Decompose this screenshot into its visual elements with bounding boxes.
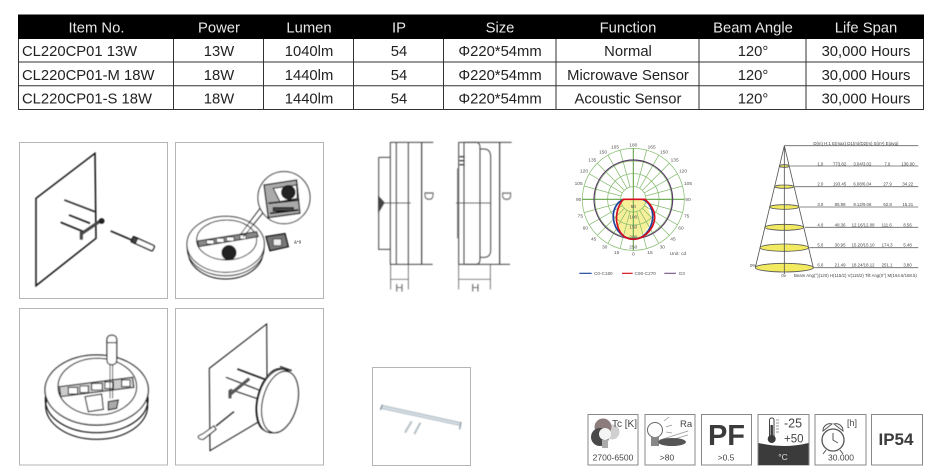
data columns: 136.00 <box>901 161 915 166</box>
angle and intensity labels: 90 <box>685 197 691 203</box>
angle and intensity labels: 45 <box>591 236 597 242</box>
panel: mounting bracket and screws <box>372 368 470 466</box>
icon: lifetime alarm clock: [h] <box>847 418 857 428</box>
data columns: 0% <box>750 263 756 268</box>
data columns: 773.82 <box>833 161 847 166</box>
data columns: 9.12/9.06 <box>853 202 872 207</box>
data columns: 48.36 <box>835 222 846 227</box>
icon: power factor: >0.5 <box>718 452 735 462</box>
angle and intensity labels: 45 <box>670 236 676 242</box>
table header row: Beam Angle <box>713 21 793 37</box>
data columns: 6.0 <box>817 263 824 268</box>
angle and intensity labels: 120 <box>679 168 687 174</box>
table row: CL220CP01-M 18W: 30,000 Hours <box>822 68 910 84</box>
cone with light ellipses <box>755 146 813 274</box>
table row: CL220CP01 13W: 30,000 Hours <box>822 44 910 60</box>
angle and intensity labels: 150 <box>629 224 638 230</box>
table row: CL220CP01 13W: 120° <box>738 44 768 60</box>
angle and intensity labels: 60 <box>583 226 588 232</box>
icon: lifetime alarm clock: 30.000 <box>828 452 854 462</box>
icon: colour temperature <box>588 414 638 465</box>
data columns: 6.08/6.04 <box>853 182 872 187</box>
icon: colour rendering index <box>645 414 695 465</box>
data columns: 251.1 <box>882 263 893 268</box>
data columns: 85.98 <box>835 202 846 207</box>
data columns: 1.0 <box>817 161 824 166</box>
side view with bracket <box>379 142 435 295</box>
data columns: 3.04/3.02 <box>853 161 872 166</box>
side view with bracket: H <box>395 283 403 295</box>
data columns: 27.9 <box>883 182 892 187</box>
angle and intensity labels: 165 <box>611 145 619 151</box>
table row: CL220CP01-M 18W: CL220CP01-M 18W <box>22 68 154 84</box>
table row: CL220CP01-S 18W: 18W <box>204 92 234 108</box>
data columns: 4.0 <box>817 222 824 227</box>
table header row <box>18 14 924 39</box>
icon: power factor: PF <box>708 420 745 452</box>
table header row: Item No. <box>69 21 124 37</box>
angle and intensity labels: 120 <box>580 168 588 174</box>
dimension drawing: side views <box>379 142 513 295</box>
table row: CL220CP01-M 18W: Φ220*54mm <box>458 68 542 84</box>
data columns: 62.8 <box>883 202 892 207</box>
data columns: 5.0 <box>817 243 824 248</box>
side view with sensor dome <box>456 142 513 295</box>
data columns: 3.0 <box>817 202 824 207</box>
data columns: 7.0 <box>884 161 891 166</box>
table row: CL220CP01-S 18W: 120° <box>738 92 768 108</box>
table row: CL220CP01-M 18W: 54 <box>391 68 407 84</box>
table grid <box>18 39 924 110</box>
angle and intensity labels: 100 <box>629 214 638 220</box>
data columns: 15.20/15.10 <box>852 243 875 248</box>
angle and intensity labels: 30 <box>660 245 665 251</box>
angle and intensity labels: 105 <box>684 181 692 187</box>
curve: G3 <box>594 160 673 239</box>
panel: step 4, mount lamp on wall <box>176 308 324 465</box>
icon: operating temperature: -25 <box>784 417 802 431</box>
icon row: product ratings <box>588 414 922 465</box>
angle and intensity labels: 50 <box>631 204 636 210</box>
angle and intensity labels: 135 <box>588 158 597 164</box>
chart legend <box>579 271 685 276</box>
data columns: D(m) H:1 E(max) D1(m)/D2(m) S(m²) E(avg) <box>813 141 899 146</box>
angle and intensity labels: 30 <box>602 245 608 251</box>
data columns: 111.6 <box>882 222 892 227</box>
table row: CL220CP01-S 18W: CL220CP01-S 18W <box>22 92 152 108</box>
data columns: 5.48 <box>903 243 912 248</box>
table row: CL220CP01 13W: 1040lm <box>285 44 333 60</box>
table row: CL220CP01-M 18W: 120° <box>738 68 768 84</box>
data columns: 3.80 <box>903 263 912 268</box>
angle and intensity labels <box>575 143 692 258</box>
data columns: 2.0 <box>817 182 824 187</box>
angle and intensity labels: 15 <box>614 250 620 256</box>
table header row: Power <box>198 21 240 37</box>
chart legend: G3 <box>679 271 685 276</box>
icon: operating temperature: +50 <box>784 434 804 446</box>
angle and intensity labels: 0 <box>632 252 635 258</box>
side view with sensor dome: H <box>471 283 479 295</box>
angle and intensity labels: 180 <box>629 143 638 149</box>
data columns: 21.49 <box>835 263 846 268</box>
icon: IP54 rating: IP54 <box>879 430 914 449</box>
table row: CL220CP01-S 18W: 30,000 Hours <box>822 92 910 108</box>
specification table <box>18 14 924 110</box>
angle and intensity labels: 250 <box>629 244 638 250</box>
angle and intensity labels: 15 <box>647 250 653 256</box>
polar light distribution chart <box>575 143 692 276</box>
angle and intensity labels: 75 <box>578 213 583 219</box>
angle and intensity labels: 200 <box>629 234 638 240</box>
data columns: 30.95 <box>835 243 846 248</box>
data columns: 15.21 <box>902 202 914 207</box>
icon: power factor <box>702 414 752 465</box>
table header row: Function <box>600 21 656 37</box>
data columns <box>750 141 917 278</box>
table header row: Size <box>486 21 514 37</box>
side view with bracket: D <box>421 191 435 201</box>
icon: colour rendering index: Ra <box>680 419 693 430</box>
table header row: Lumen <box>286 21 332 37</box>
angle and intensity labels: 135 <box>671 158 679 164</box>
angle and intensity labels: 90 <box>576 197 582 203</box>
table row: CL220CP01-M 18W <box>22 68 910 84</box>
table row: CL220CP01-S 18W: 54 <box>391 92 407 108</box>
table row: CL220CP01 13W: CL220CP01 13W <box>22 44 137 60</box>
panel: step 2, connect driver <box>176 142 324 298</box>
angle and intensity labels: 60 <box>678 226 684 232</box>
table row: CL220CP01 13W <box>22 44 910 60</box>
icon: colour rendering index: >80 <box>660 452 674 462</box>
table row: CL220CP01-M 18W: 18W <box>204 68 234 84</box>
icon: operating temperature <box>758 414 809 465</box>
table row: CL220CP01 13W: Φ220*54mm <box>458 44 542 60</box>
panel: step 1, fix bracket to wall <box>20 142 168 298</box>
beam cone illuminance diagram <box>750 141 918 278</box>
angle and intensity labels: 150 <box>599 150 607 156</box>
angle and intensity labels: Unit: cd <box>670 251 686 257</box>
lit area fill <box>615 199 652 239</box>
data columns: 174.3 <box>882 243 893 248</box>
table row: CL220CP01-S 18W: Φ220*54mm <box>458 92 542 108</box>
side view with sensor dome: D <box>499 191 513 201</box>
table row: CL220CP01 13W: Normal <box>604 44 652 60</box>
table header row: Life Span <box>835 21 897 37</box>
data columns: 8.56 <box>903 222 912 227</box>
screw count label: &*9 <box>294 240 302 244</box>
table row: CL220CP01 13W: 54 <box>391 44 407 60</box>
angle and intensity labels: 150 <box>660 150 668 156</box>
table row: CL220CP01 13W: 13W <box>204 44 234 60</box>
polar grid <box>582 148 684 250</box>
table row: CL220CP01-S 18W <box>22 92 910 108</box>
icon: operating temperature: °C <box>778 452 788 462</box>
data columns: 34.22 <box>902 182 914 187</box>
table row: CL220CP01-M 18W: Microwave Sensor <box>567 68 689 84</box>
data columns: 12.16/12.08 <box>852 222 875 227</box>
curve: C90-C270 <box>616 199 655 239</box>
table row: CL220CP01-M 18W: 1440lm <box>285 68 333 84</box>
angle and intensity labels: 165 <box>648 145 656 151</box>
icon: colour temperature: Tc [K] <box>612 419 637 430</box>
data columns: 0v <box>781 273 787 278</box>
table header row: IP <box>392 21 406 37</box>
icon: colour temperature: 2700-6500 <box>593 452 634 462</box>
table row: CL220CP01-S 18W: Acoustic Sensor <box>575 92 682 108</box>
data columns: 193.45 <box>833 182 847 187</box>
distance lines <box>784 146 918 268</box>
angle and intensity labels: 105 <box>575 181 583 187</box>
chart legend: C0-C180 <box>594 271 613 276</box>
table row: CL220CP01-S 18W: 1440lm <box>285 92 333 108</box>
chart legend: C90-C270 <box>635 271 656 276</box>
icon: lifetime alarm clock <box>815 414 866 465</box>
angle and intensity labels: 75 <box>684 213 690 219</box>
icon: IP54 rating <box>872 414 922 465</box>
panel: step 3, screw cover with screwdriver <box>20 308 168 465</box>
curve: C0-C180 <box>613 199 653 239</box>
data columns: 18.24/18.12 <box>852 263 875 268</box>
data columns: Beam Ang(°)(120) H(115/2) V(115/2) Tilt Ang(0°) M(164.6/168.5) <box>794 273 917 278</box>
